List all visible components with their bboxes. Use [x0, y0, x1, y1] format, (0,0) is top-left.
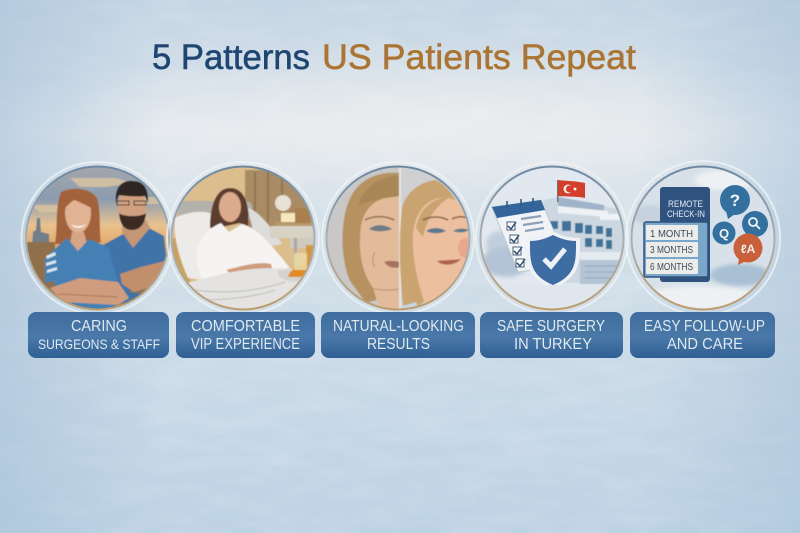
label: NATURAL-LOOKING — [333, 318, 464, 335]
schedule list: 6 MONTHS — [650, 262, 693, 273]
label — [28, 312, 169, 358]
illustration: hospital, checklist and shield — [482, 180, 622, 308]
icon: Turkish flag — [557, 180, 585, 202]
label: COMFORTABLE — [191, 318, 300, 335]
illustration: remote check-in schedule and chat bubbles — [635, 168, 774, 308]
ring — [626, 161, 780, 315]
label: CARING — [71, 318, 127, 335]
man — [102, 228, 166, 292]
panel: natural-looking results — [321, 162, 475, 358]
icon: shield with check — [530, 232, 580, 285]
panel: caring surgeons and staff — [20, 160, 175, 358]
label: AND CARE — [667, 336, 743, 353]
title: US Patients Repeat — [322, 38, 636, 77]
label — [176, 312, 315, 358]
label: EASY FOLLOW-UP — [644, 318, 765, 335]
divider — [399, 162, 401, 312]
icon: search bubble — [742, 211, 768, 238]
icon: Q bubble — [712, 222, 736, 244]
label: VIP EXPERIENCE — [191, 336, 300, 353]
label — [480, 312, 623, 358]
title — [152, 38, 636, 77]
icon: checklist calendar — [492, 198, 554, 272]
icon: A bubble: ℓA — [741, 242, 756, 256]
panel: safe surgery in Turkey — [476, 162, 628, 358]
ring — [22, 162, 174, 314]
clouds — [482, 231, 530, 277]
ring — [476, 162, 628, 314]
hospital building — [543, 197, 626, 284]
label: SAFE SURGERY — [497, 318, 605, 335]
icon: tablet — [660, 187, 710, 282]
title: 5 Patterns — [152, 38, 310, 77]
icon: Q bubble: Q — [719, 226, 729, 241]
schedule list: 1 MONTH — [650, 229, 693, 240]
photo: patient resting in hospital bed — [172, 168, 314, 308]
photo: surgeon and nurse in front of sunset skyline — [27, 168, 168, 308]
icon: question bubble — [720, 185, 750, 219]
icon: A bubble — [734, 234, 762, 265]
icon: question bubble: ? — [730, 191, 740, 210]
icon: tablet: REMOTE — [668, 199, 703, 209]
schedule list — [644, 222, 708, 277]
schedule list: 3 MONTHS — [650, 245, 693, 256]
label: RESULTS — [367, 336, 430, 353]
icon: tablet: CHECK-IN — [667, 209, 705, 219]
before half — [342, 173, 400, 303]
ring — [167, 162, 319, 314]
woman — [55, 189, 101, 244]
ring — [322, 162, 474, 314]
panel: easy follow-up and care — [626, 161, 780, 358]
after half — [400, 180, 457, 312]
label — [321, 312, 475, 358]
clouds — [632, 170, 770, 310]
label: SURGEONS & STAFF — [38, 336, 160, 352]
panel: comfortable VIP experience — [167, 162, 319, 358]
label — [630, 312, 775, 358]
label: IN TURKEY — [514, 336, 592, 353]
photo: before and after portrait — [328, 168, 468, 308]
